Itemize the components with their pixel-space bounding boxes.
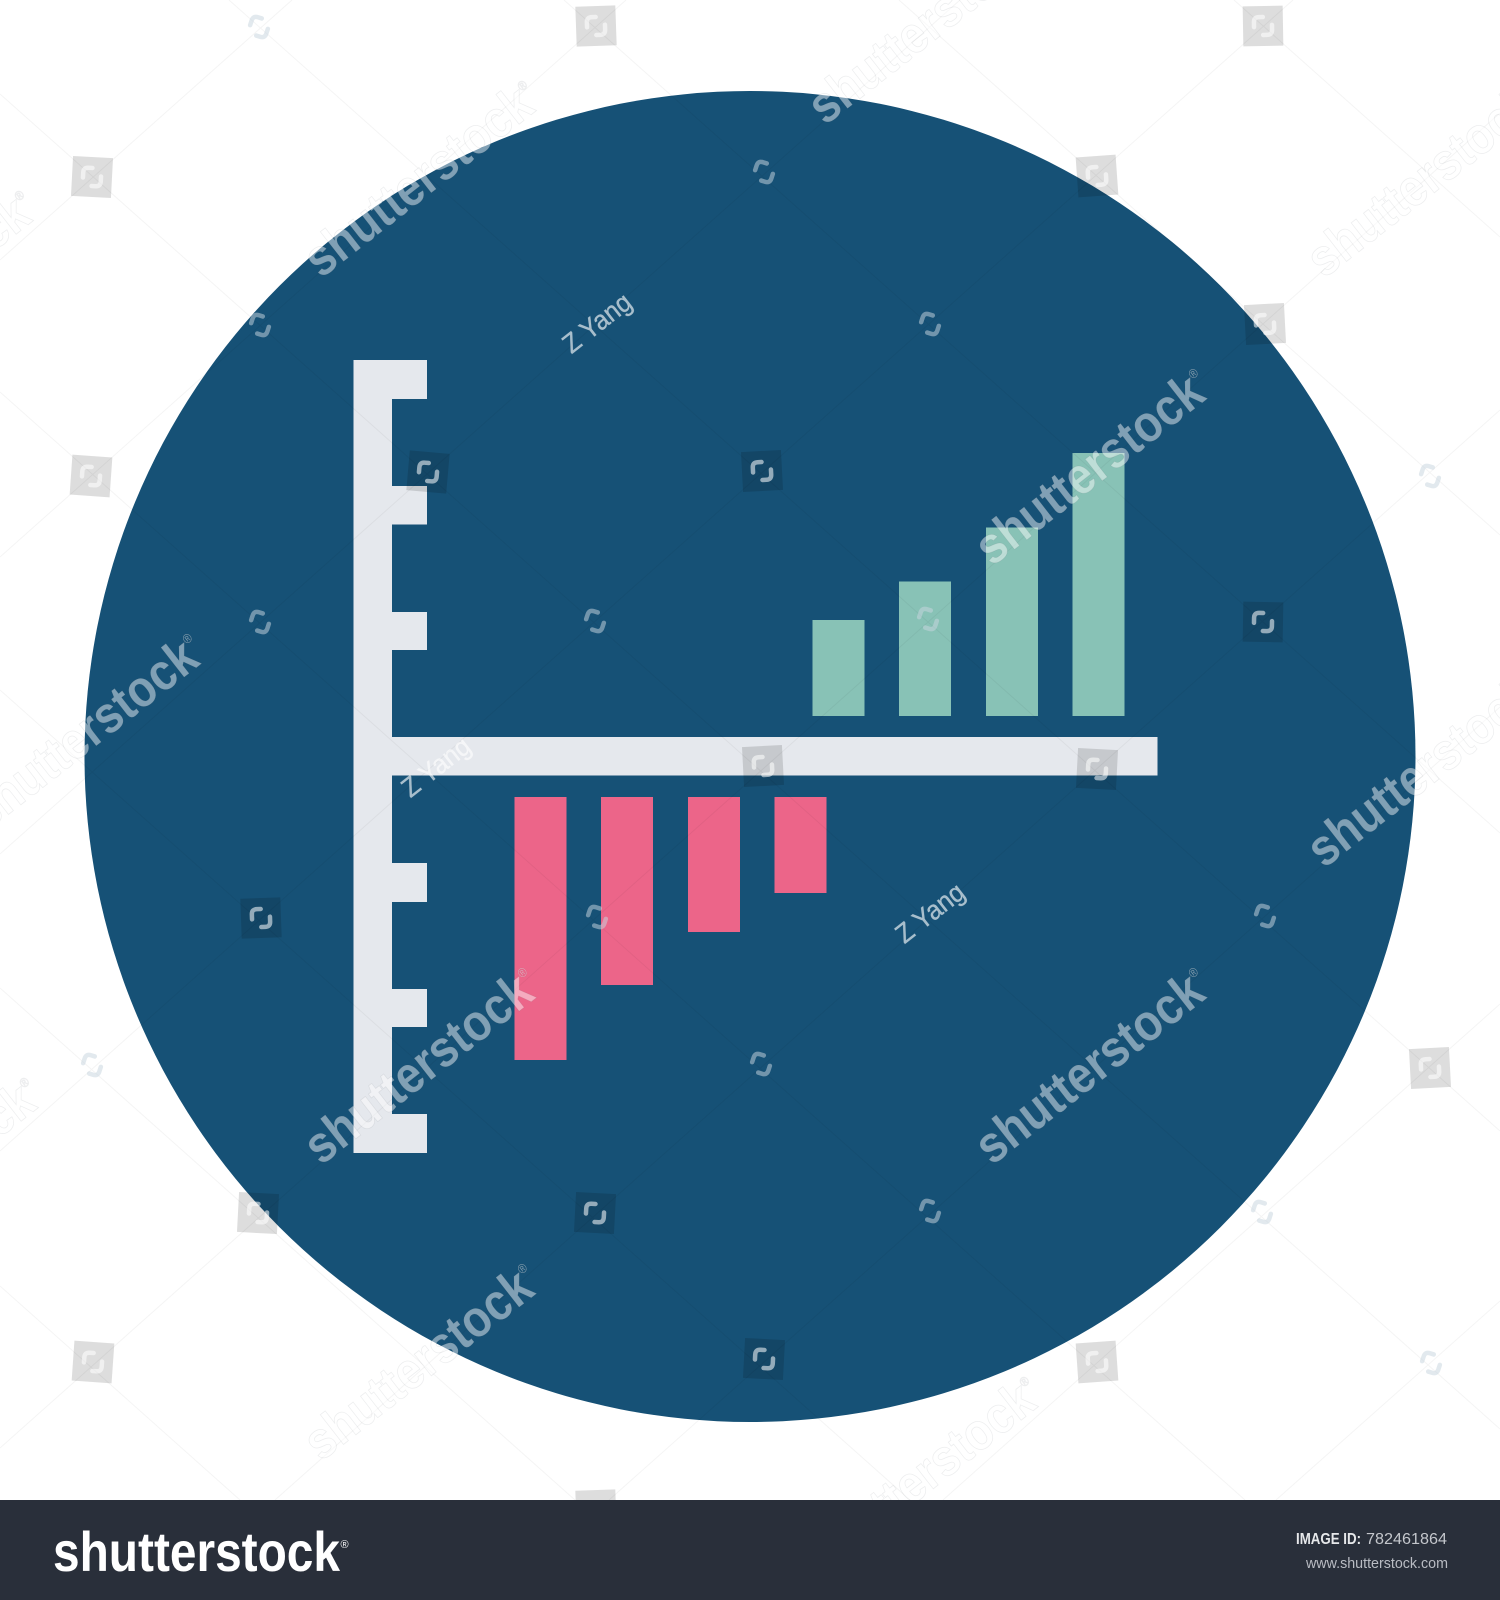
image id label: IMAGE ID: — [1296, 1531, 1361, 1548]
blue circle background — [84, 91, 1416, 1422]
website: www.shutterstock.com — [1305, 1555, 1448, 1572]
diagonal shutterstock watermarks: ® — [11, 187, 28, 204]
positive green bars — [812, 453, 1124, 716]
registered mark: ® — [340, 1539, 349, 1551]
diagonal shutterstock watermarks: ® — [1016, 1373, 1033, 1390]
diagonal shutterstock watermarks: ® — [514, 77, 531, 94]
contributor watermarks — [396, 287, 970, 949]
diagonal shutterstock watermarks: ® — [16, 1074, 33, 1091]
watermark bare icons — [81, 16, 1442, 1374]
diagonal shutterstock watermarks: shutterstock — [293, 51, 574, 288]
contributor watermarks: Z Yang — [396, 731, 476, 803]
footer bar — [0, 1500, 1500, 1600]
diagonal shutterstock watermarks: ® — [1185, 964, 1202, 981]
diagonal shutterstock watermarks: shutterstock — [293, 1234, 574, 1471]
footer logo: shutterstock — [53, 1520, 341, 1583]
diagonal shutterstock watermarks: ® — [179, 630, 196, 647]
diagonal shutterstock watermarks: ® — [514, 1260, 531, 1277]
diagonal shutterstock watermarks: shutterstock — [964, 938, 1245, 1175]
diagonal shutterstock watermarks: shutterstock — [293, 938, 574, 1175]
diagonal shutterstock watermarks: shutterstock — [964, 339, 1245, 576]
contributor watermarks: Z Yang — [557, 287, 637, 359]
axes: vertical ruler with ticks and horizontal baseline — [354, 360, 1158, 1153]
diagonal shutterstock watermarks: shutterstock — [795, 1347, 1076, 1584]
diagonal shutterstock watermarks: ® — [1185, 365, 1202, 382]
image id number: 782461864 — [1366, 1531, 1447, 1548]
diagonal shutterstock watermarks: ® — [514, 964, 531, 981]
contributor watermarks: Z Yang — [890, 877, 970, 949]
negative pink bars — [514, 797, 826, 1060]
